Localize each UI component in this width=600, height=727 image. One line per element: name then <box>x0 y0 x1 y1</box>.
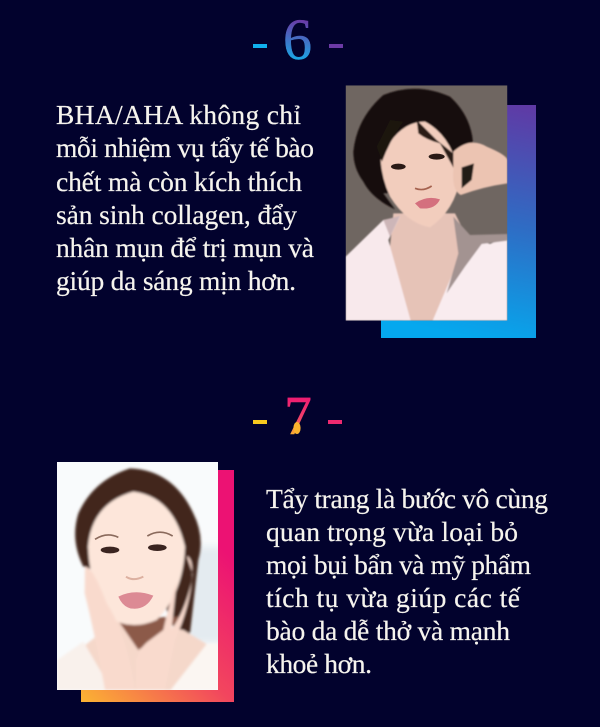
text block: Tẩy trang <box>266 483 548 679</box>
text block: Tẩy trang: mọi bụi bẩn và mỹ phẩm <box>266 549 531 580</box>
text block: Tẩy trang: khoẻ hơn. <box>266 648 372 679</box>
text block: BHA/AHA: mỗi nhiệm vụ tẩy tế bào <box>56 132 314 163</box>
heading: number 6: 6 <box>283 7 312 72</box>
text block: Tẩy trang: quan trọng vừa loại bỏ <box>266 516 518 547</box>
photo: woman with short dark hair and white shirt <box>346 85 507 321</box>
heading: number 7 <box>253 385 342 446</box>
text block: BHA/AHA: nhân mụn để trị mụn và <box>56 232 314 263</box>
text block: BHA/AHA <box>56 99 314 296</box>
gradient frame behind photo 7 <box>81 470 234 702</box>
text block: Tẩy trang: bào da dễ thở và mạnh <box>266 615 510 646</box>
photo: woman holding her cheeks <box>57 462 223 690</box>
gradient frame behind photo 6 <box>381 105 536 338</box>
text block: Tẩy trang: Tẩy trang là bước vô cùng <box>266 483 548 514</box>
text block: BHA/AHA: BHA/AHA không chỉ <box>56 99 301 130</box>
text block: BHA/AHA: chết mà còn kích thích <box>56 166 302 197</box>
heading: number 6 <box>253 7 343 72</box>
text block: BHA/AHA: giúp da sáng mịn hơn. <box>56 265 296 296</box>
text block: BHA/AHA: sản sinh collagen, đẩy <box>56 199 297 230</box>
text block: Tẩy trang: tích tụ vừa giúp các tế <box>266 582 521 613</box>
heading: number 7: 7 <box>284 385 312 446</box>
